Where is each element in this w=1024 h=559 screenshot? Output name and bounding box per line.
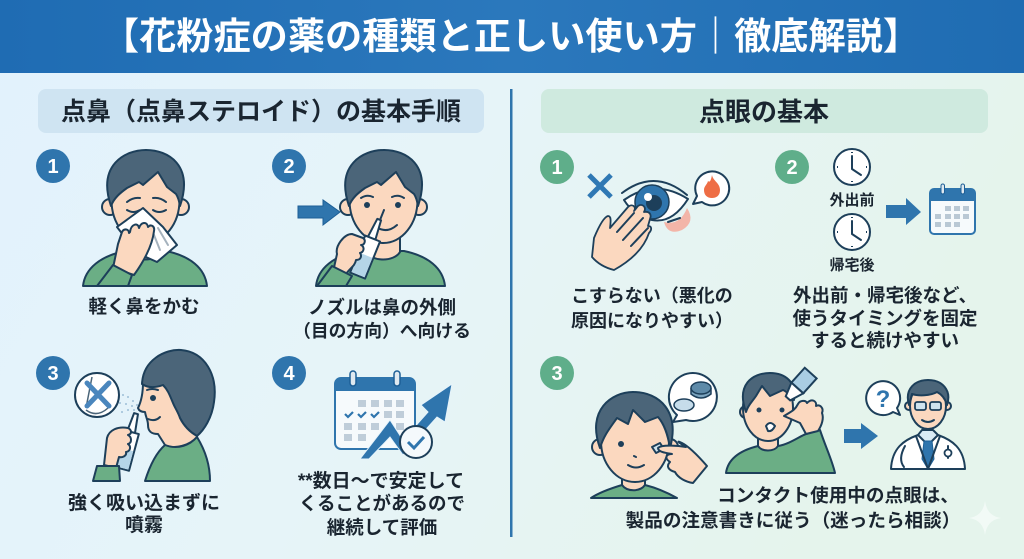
speech bubble: question: ?: [876, 386, 890, 413]
caption 3: 強く吸い込まずに: [68, 492, 220, 514]
step badge 1: [540, 150, 574, 184]
caption 4: [298, 470, 465, 538]
speech bubble: question: [866, 381, 900, 415]
icon: rubbing eye: [592, 181, 691, 270]
heading: 点眼: 点眼の基本: [699, 97, 829, 127]
caption 2: [792, 285, 978, 351]
illustration: person with contact lens: [591, 392, 707, 498]
caption 3: 噴霧: [125, 514, 163, 536]
caption 3: [626, 485, 960, 531]
caption 2: （目の方向）へ向ける: [293, 320, 471, 341]
icon: arrow to nose: [298, 200, 340, 225]
icon: calendar: [930, 184, 975, 234]
title banner: [0, 0, 1024, 73]
caption 3: コンタクト使用中の点眼は、: [717, 485, 959, 506]
step badge 2: [775, 150, 809, 184]
icon: flame bubble: [693, 171, 729, 205]
spray mist: [119, 394, 138, 413]
step badge 3: [36, 356, 70, 390]
icon: calendar with rising arrow: [335, 371, 452, 459]
step badge 2: 2: [283, 156, 295, 178]
caption 4: **数日～で安定して: [298, 470, 464, 492]
caption 2: すると続けやすい: [811, 330, 959, 351]
step badge 4: 4: [283, 363, 295, 385]
arrow to doctor: [844, 423, 878, 449]
caption 2: 使うタイミングを固定: [792, 308, 978, 329]
caption 1: 軽く鼻をかむ: [88, 296, 200, 317]
caption 2: 外出前・帰宅後など、: [793, 285, 977, 306]
speech bubble: contact lenses: [669, 373, 717, 422]
title banner: 【花粉症の薬の種類と正しい使い方｜徹底解説】: [102, 15, 920, 57]
label: 外出前: 外出前: [829, 191, 875, 209]
arrow to calendar: [886, 198, 921, 225]
caption 2: ノズルは鼻の外側: [308, 297, 456, 318]
caption 2: [293, 297, 471, 341]
step badge 2: 2: [786, 157, 798, 179]
step badge 2: [272, 149, 306, 183]
illustration: person blowing nose: [83, 150, 207, 286]
caption 3: [68, 492, 220, 536]
caption 1: こすらない（悪化の: [571, 286, 733, 306]
caption 3: 製品の注意書きに従う（迷ったら相談）: [626, 510, 960, 531]
icon: cross mark: [589, 175, 611, 197]
step badge 3: 3: [551, 363, 563, 385]
panel: 点眼の基本: [540, 89, 988, 531]
step badge 1: [36, 149, 70, 183]
sparkle watermark: [969, 501, 1001, 535]
step badge 1: 1: [551, 157, 563, 179]
caption 1: 原因になりやすい）: [571, 311, 733, 331]
illustration: person applying eye drops: [726, 368, 835, 473]
illustration: person aiming nozzle: [316, 150, 445, 286]
heading: 点眼: [541, 89, 988, 133]
label: 帰宅後: 帰宅後: [829, 256, 875, 274]
icon: no strong inhale: [75, 373, 119, 417]
illustration: person spraying in profile: [93, 350, 215, 481]
caption 4: 継続して評価: [327, 517, 437, 538]
step badge 4: [272, 356, 306, 390]
center divider: [510, 89, 512, 537]
heading: 点鼻: [38, 89, 484, 133]
caption 4: くることがあるので: [299, 493, 465, 514]
heading: 点鼻: 点鼻（点鼻ステロイド）の基本手順: [61, 98, 461, 126]
caption 1: [571, 286, 733, 331]
step badge 3: [540, 356, 574, 390]
step badge 1: 1: [47, 156, 59, 178]
illustration: doctor: [891, 380, 965, 469]
icon: clock before going out: [834, 149, 870, 185]
icon: clock after returning: [834, 214, 870, 250]
step badge 3: 3: [47, 363, 59, 385]
panel: 点鼻の基本手順: [36, 89, 484, 538]
